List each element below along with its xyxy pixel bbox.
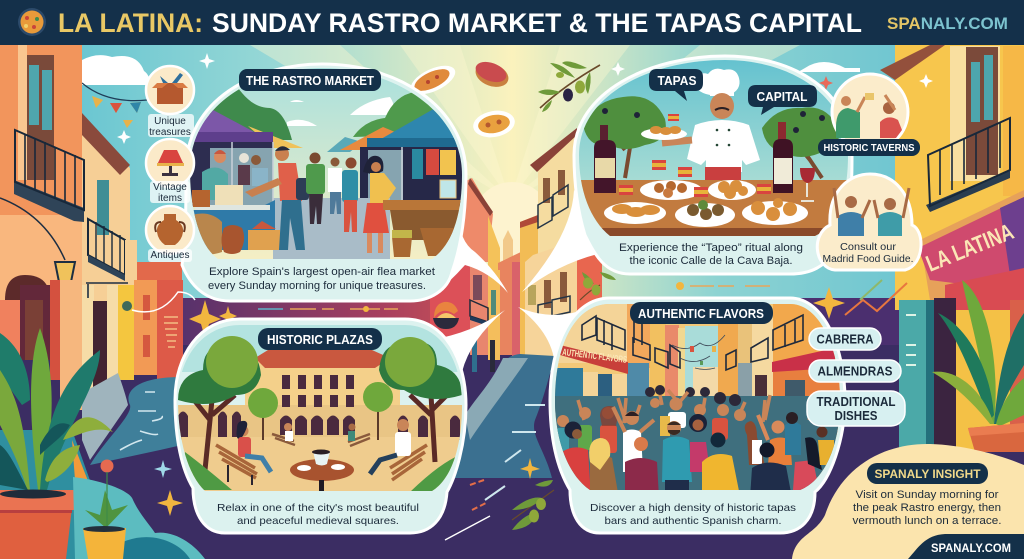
benches and people: [184, 419, 455, 491]
sparkles and decoration: [117, 53, 933, 516]
icon: pizza plate: [407, 60, 459, 100]
person: red shirt: [563, 447, 590, 490]
caption: Explore Spain's largest open-air flea market: [209, 266, 435, 278]
caption: [590, 502, 796, 527]
crowd: [555, 385, 840, 498]
icons column: [146, 66, 194, 262]
sign: La Latina: [918, 197, 1024, 292]
bubble tails: [430, 180, 606, 372]
person: white shirt: [623, 430, 643, 472]
food in the sky: [407, 58, 600, 140]
panel: tapas: [560, 55, 860, 274]
person: teal beard: [662, 436, 692, 482]
person: dark hair pink: [793, 460, 819, 490]
icon: bowl: [433, 302, 459, 329]
caption: Discover a high density of historic tapas: [590, 502, 796, 514]
chef: [662, 69, 760, 180]
caption: every Sunday morning for unique treasures.: [208, 280, 426, 292]
pill heading: SPANALY INSIGHT: [874, 467, 981, 481]
insight text: Visit on Sunday morning for: [856, 489, 999, 501]
caption: [217, 502, 419, 527]
caption: [208, 266, 435, 292]
icon: antiques: Antiques: [151, 250, 189, 261]
icon: unique treasures: [146, 66, 194, 138]
pill heading: [867, 463, 988, 484]
site brand: NALY.COM: [921, 14, 1008, 33]
icon: olive branch: [538, 61, 600, 112]
person: yellow shirt: [702, 454, 739, 490]
icon: paella: [18, 8, 46, 36]
title: SUNDAY RASTRO MARKET & THE TAPAS CAPITAL: [212, 8, 862, 38]
table: [290, 459, 354, 481]
pill heading: AUTHENTIC FLAVORS: [638, 306, 764, 321]
panel: spanaly insight: [792, 444, 1024, 559]
icon: unique treasures: treasures: [149, 127, 191, 138]
panel: historic plazas: [175, 319, 466, 533]
illustration: crowded street: [550, 300, 845, 498]
title: LA LATINA:: [58, 8, 203, 38]
callout: consult food guide: Consult our: [840, 242, 897, 253]
pill heading: THE RASTRO MARKET: [246, 73, 374, 88]
pill heading: HISTORIC PLAZAS: [267, 332, 373, 347]
icon: steak: [472, 58, 512, 91]
pill heading: [239, 69, 381, 91]
icon: unique treasures: Unique: [154, 116, 186, 127]
dashed decorative line: [258, 280, 907, 315]
tag: traditional dishes: [807, 391, 905, 426]
icon: vintage items: items: [158, 193, 182, 204]
callout: consult food guide: [817, 174, 921, 270]
illustration: chef and tapas table: [579, 60, 848, 236]
icon: tapa plate: [471, 108, 517, 140]
centre street buildings: [430, 128, 602, 372]
caption: the iconic Calle de la Cava Baja.: [630, 255, 792, 267]
person: maroon back: [625, 458, 658, 490]
callout: historic taverns: [818, 74, 920, 156]
person: pink dress: [690, 442, 710, 472]
footer brand: SPANALY.COM: [931, 541, 1011, 555]
panel: the rastro market: [175, 64, 466, 301]
callout: historic taverns: HISTORIC TAVERNS: [824, 143, 915, 154]
illustration: plaza: [175, 322, 465, 495]
insight text: vermouth lunch on a terrace.: [852, 515, 1002, 527]
site brand: SPA: [887, 14, 921, 33]
centre winding road: [445, 354, 555, 540]
icon: antiques: [146, 206, 194, 262]
illustration: crowded street: AUTHENTIC FLAVORS: [562, 347, 627, 366]
header bar: [0, 0, 1024, 45]
winding street left: [82, 373, 182, 465]
pill: tapas: [649, 69, 703, 101]
left buildings: [0, 45, 195, 415]
tag: almendras: ALMENDRAS: [818, 364, 892, 378]
bunting: [82, 83, 147, 128]
person: teal right: [785, 422, 801, 455]
insight text: [852, 489, 1002, 527]
pill: capital: CAPITAL: [756, 89, 808, 104]
illustration: market stalls: [175, 65, 465, 260]
tag: cabrera: [809, 328, 881, 350]
person: navy: [750, 462, 790, 490]
tag: almendras: [809, 360, 901, 382]
tag: traditional dishes: TRADITIONAL: [816, 395, 896, 409]
caption: bars and authentic Spanish charm.: [604, 515, 782, 527]
right building: [880, 45, 1024, 458]
people at market: [192, 146, 396, 253]
icon: olives lower: [512, 272, 616, 530]
person: yellow right: [818, 440, 834, 465]
pill heading: [630, 302, 773, 324]
wine bottles: [594, 122, 815, 201]
plates: [604, 128, 808, 227]
pill: capital: [748, 85, 817, 115]
person: white top long hair: [745, 421, 765, 465]
caption: and peaceful medieval squares.: [237, 515, 399, 527]
tag: cabrera: CABRERA: [816, 332, 874, 346]
tag: traditional dishes: DISHES: [834, 409, 878, 423]
pill heading: [258, 328, 382, 350]
stall goods: [383, 149, 465, 257]
pill: tapas: TAPAS: [658, 73, 697, 88]
panel: authentic flavors: [550, 298, 845, 533]
caption: Relax in one of the city's most beautiful: [217, 502, 419, 514]
icon: vintage items: [146, 139, 194, 204]
icon: vintage items: Vintage: [153, 182, 187, 193]
left plant: [0, 328, 113, 559]
person: blond: [590, 457, 618, 490]
callout: consult food guide: Madrid Food Guide.: [822, 254, 914, 265]
person: orange: [768, 438, 792, 465]
footer brand: [908, 534, 1024, 559]
right plant: [932, 280, 1024, 452]
insight text: the peak Rastro energy, then: [853, 502, 1001, 514]
caption: Experience the “Tapeo” ritual along: [619, 242, 803, 254]
caption: [619, 242, 803, 267]
teal foliage and small plant: [73, 460, 205, 559]
